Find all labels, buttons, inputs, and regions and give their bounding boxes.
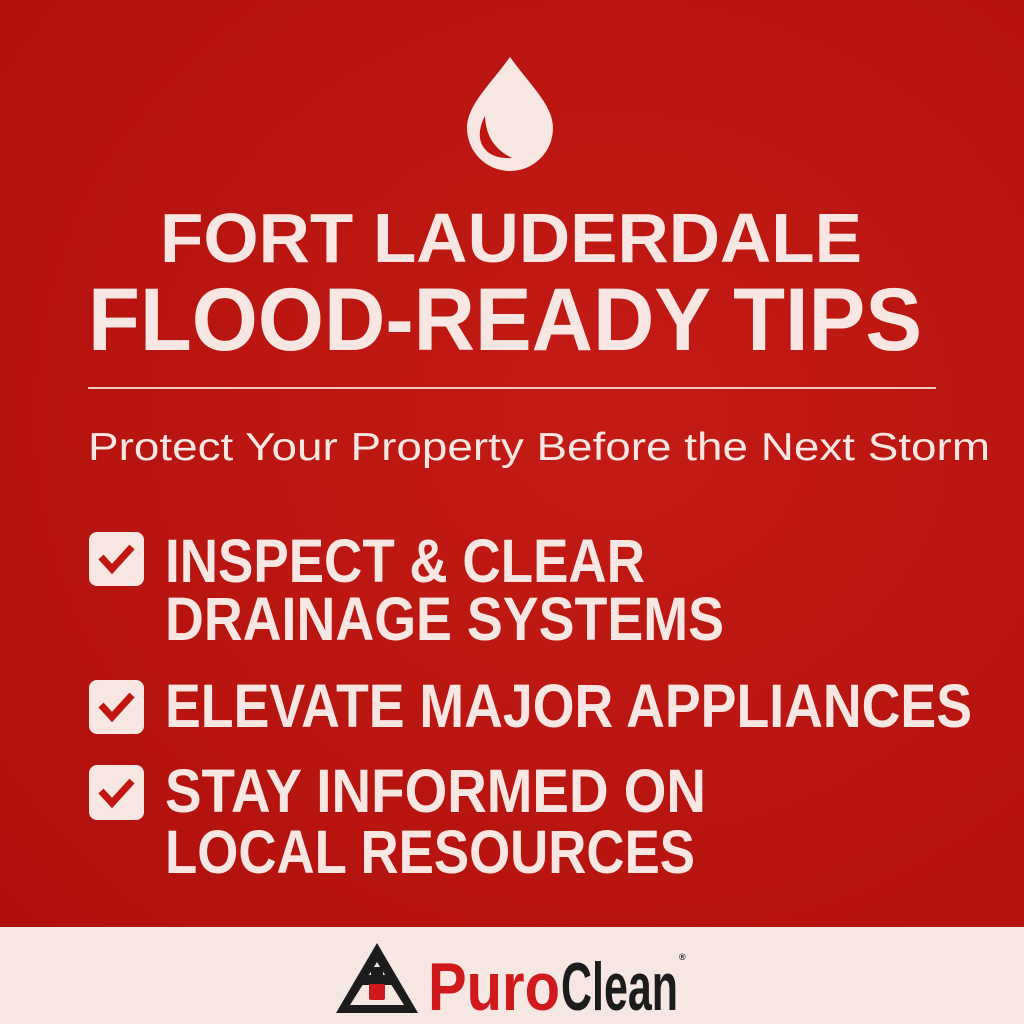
subtitle: Protect Your Property Before the Next Storm xyxy=(88,426,990,469)
item 1 xyxy=(89,527,724,653)
icon: water drop xyxy=(467,57,553,171)
item 3: LOCAL RESOURCES xyxy=(165,818,695,886)
footer xyxy=(0,927,1024,1024)
logo text: Puro xyxy=(428,949,560,1024)
item 3: STAY INFORMED ON xyxy=(165,757,706,825)
title: FLOOD-READY TIPS xyxy=(88,269,922,369)
logo text: Clean xyxy=(561,949,678,1024)
title xyxy=(88,199,922,369)
checklist xyxy=(89,527,972,886)
item 3 xyxy=(89,757,706,886)
title: FORT LAUDERDALE xyxy=(160,199,862,277)
item 1: DRAINAGE SYSTEMS xyxy=(165,585,724,653)
logo text: ® xyxy=(679,952,686,962)
logo text xyxy=(428,949,686,1024)
item 1: INSPECT & CLEAR xyxy=(165,527,645,595)
logo icon xyxy=(336,943,418,1013)
